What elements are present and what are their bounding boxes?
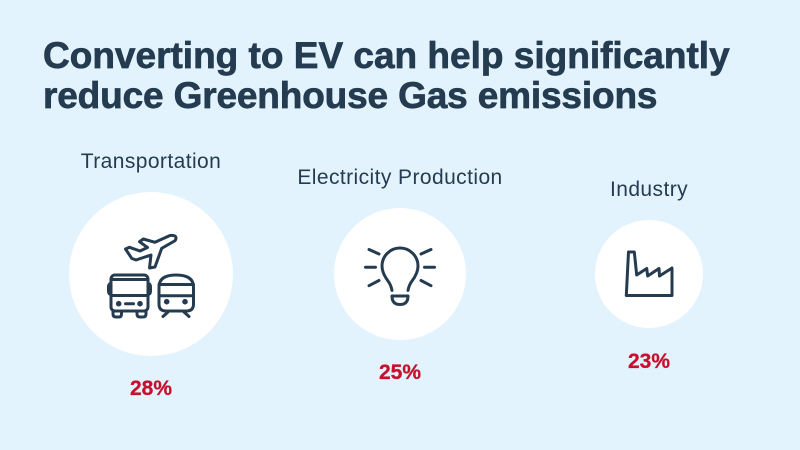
value: 25%: 25% [379,361,421,384]
icon: bus [108,275,150,317]
icon: airplane [126,235,176,268]
transportation circle with icons [69,192,233,356]
title: reduce Greenhouse Gas emissions [43,75,657,116]
icon: light bulb [366,248,434,304]
icon: factory [626,252,672,296]
value: 23%: 23% [628,350,670,373]
label: Industry: Industry [610,178,688,201]
label: Electricity Production: Electricity Production [297,166,503,189]
label: Transportation: Transportation [81,150,221,173]
electricity circle with bulb icon [334,208,466,340]
icon: train [159,275,194,316]
title: Converting to EV can help significantly [43,35,730,76]
industry circle with factory icon [595,220,703,328]
value: 28%: 28% [130,377,172,400]
title [43,35,730,116]
